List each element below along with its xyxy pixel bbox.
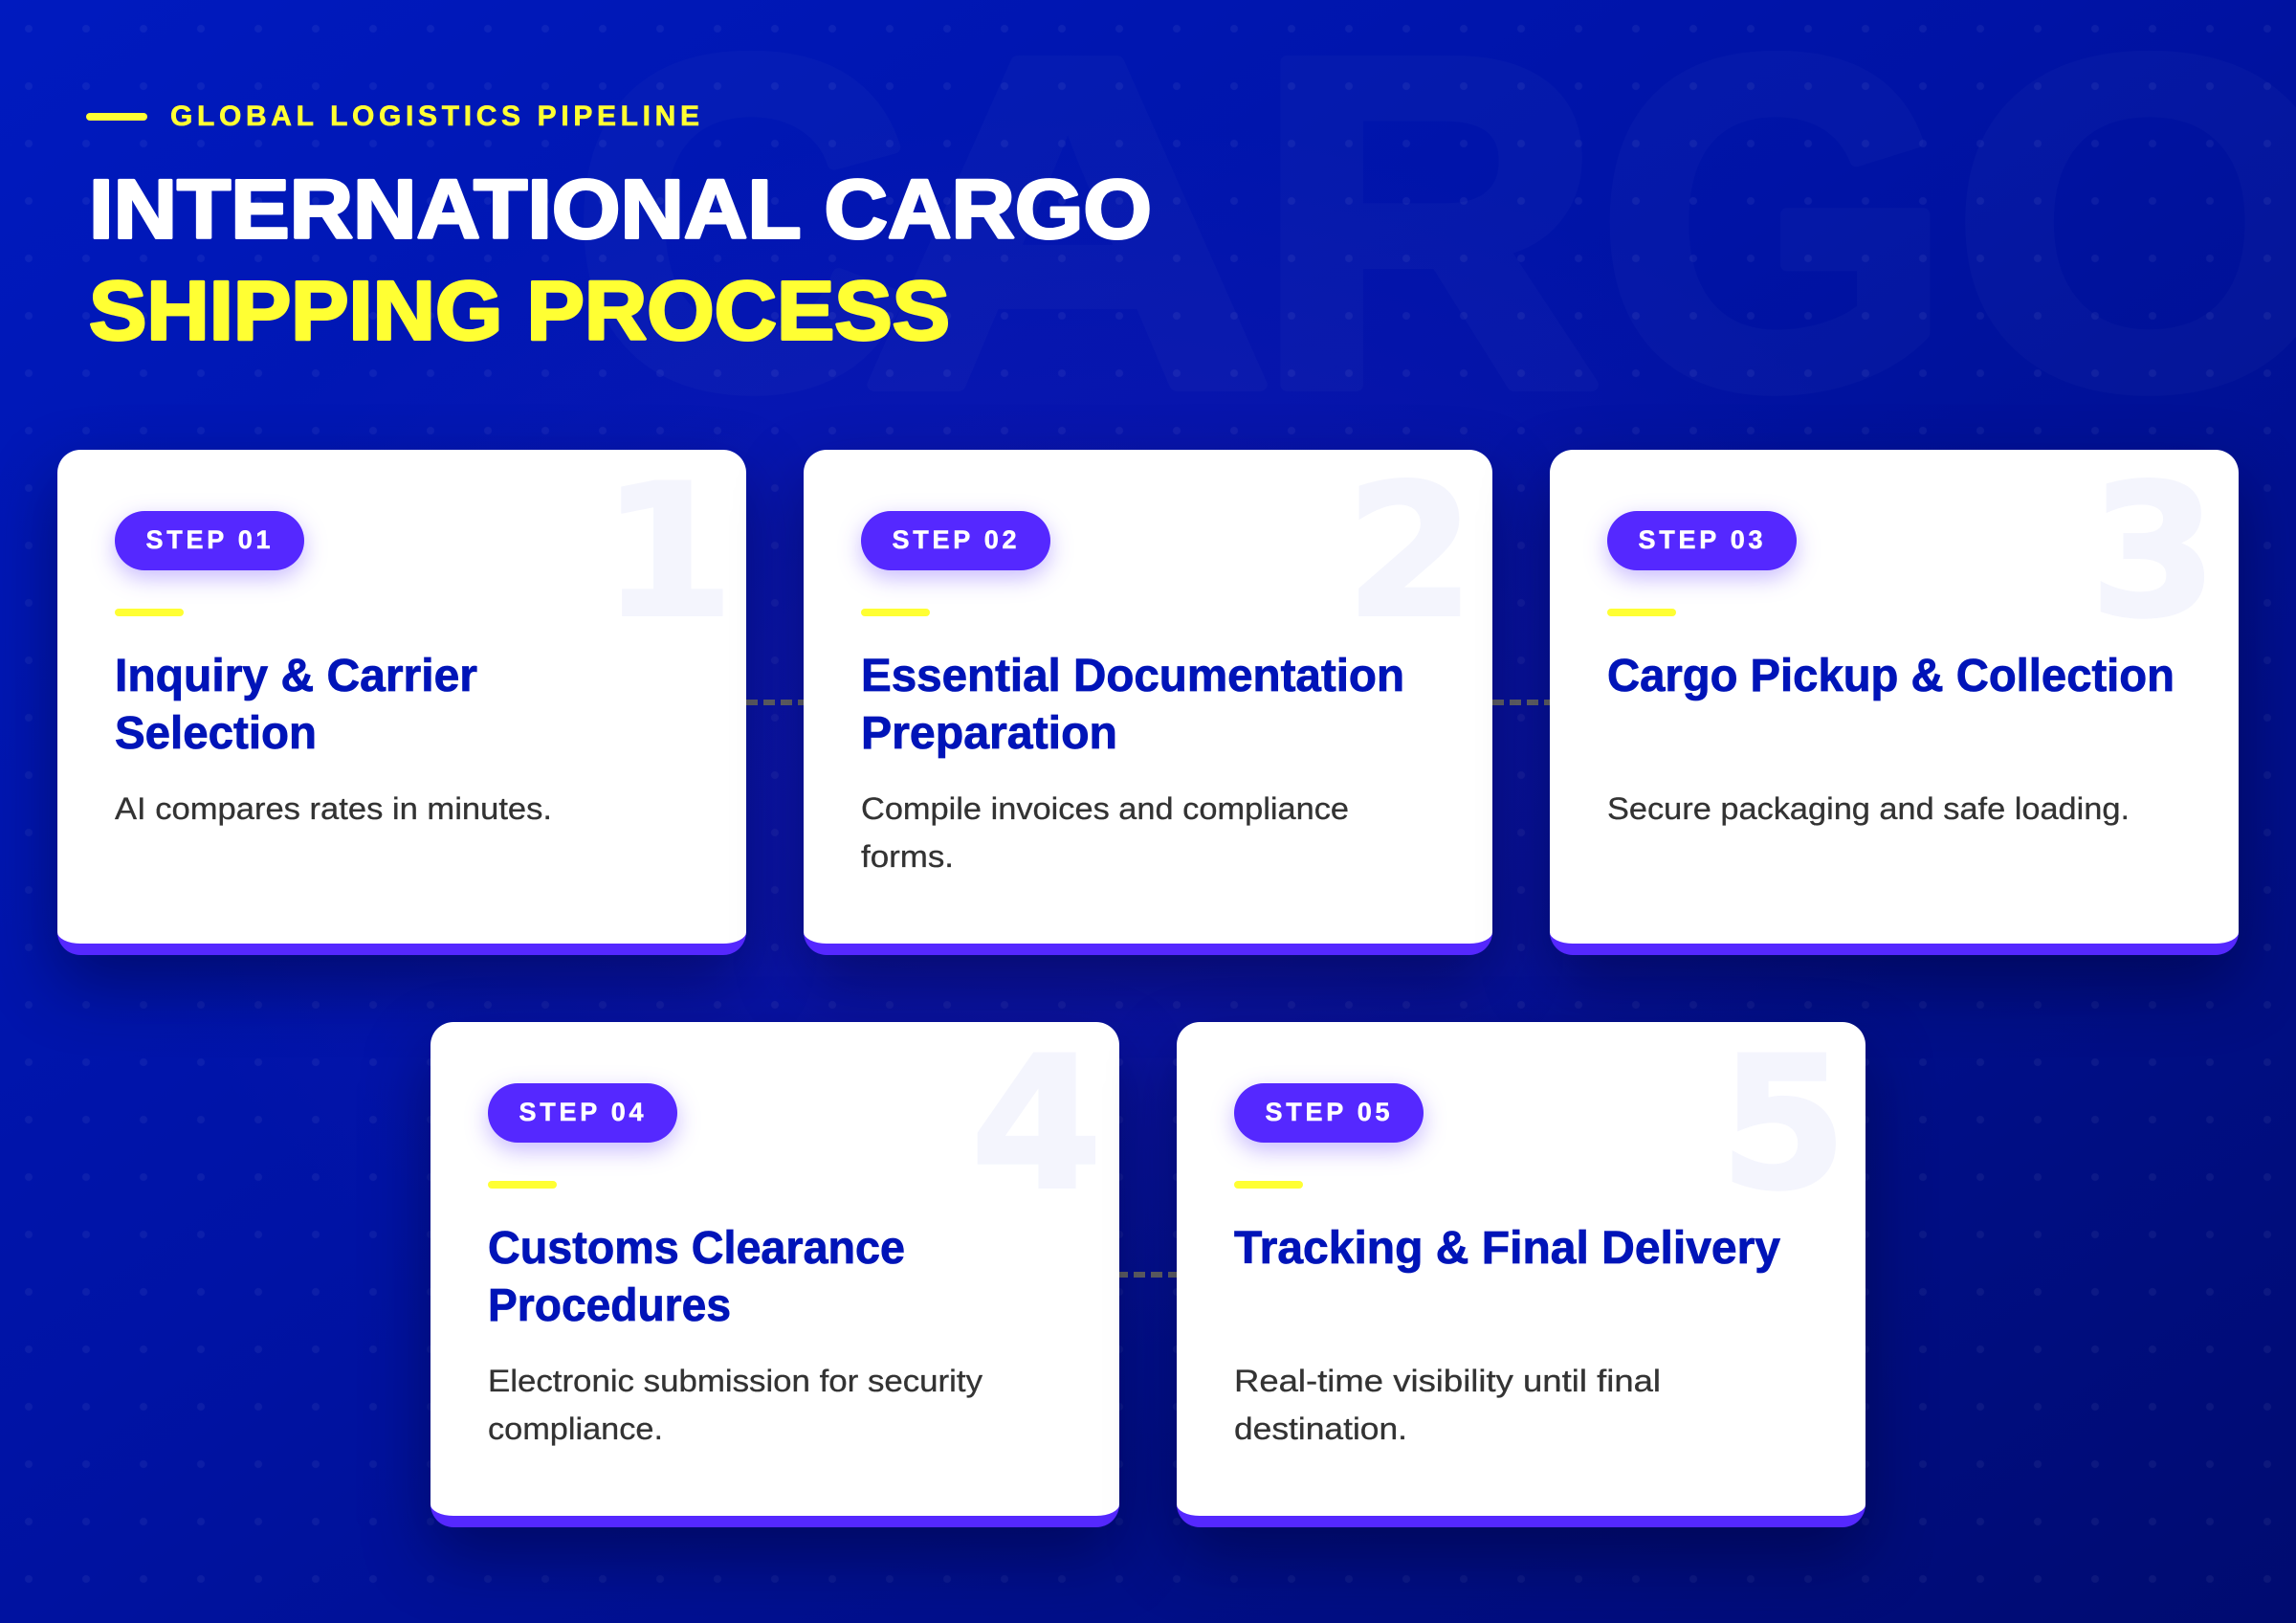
step description bbox=[488, 1364, 982, 1446]
title: INTERNATIONAL CARGO bbox=[89, 163, 1152, 256]
step title bbox=[488, 1223, 905, 1331]
panel: step 02 bbox=[804, 450, 1492, 955]
step badge: STEP 03 bbox=[1638, 525, 1762, 554]
step description: Secure packaging and safe loading. bbox=[1607, 791, 2130, 826]
yellow accent bar bbox=[1234, 1181, 1303, 1189]
yellow accent bar bbox=[1607, 609, 1676, 616]
big number 1: 1 bbox=[602, 446, 734, 657]
step title: Preparation bbox=[861, 708, 1117, 759]
step badge: STEP 04 bbox=[519, 1098, 643, 1126]
kicker: GLOBAL LOGISTICS PIPELINE bbox=[170, 100, 699, 132]
step description: Electronic submission for security bbox=[488, 1364, 982, 1398]
step title bbox=[861, 651, 1404, 759]
step title: Customs Clearance bbox=[488, 1223, 905, 1274]
step description: forms. bbox=[861, 839, 954, 874]
panel: step 05 bbox=[1177, 1022, 1866, 1527]
panel: step 01 bbox=[57, 450, 746, 955]
step badge bbox=[1234, 1083, 1424, 1143]
step badge bbox=[861, 511, 1050, 570]
step title bbox=[115, 651, 477, 759]
panel: step 03 bbox=[1550, 450, 2239, 955]
step title: Procedures bbox=[488, 1280, 731, 1331]
step title: Inquiry & Carrier bbox=[115, 651, 477, 701]
step badge bbox=[1607, 511, 1797, 570]
step badge: STEP 01 bbox=[145, 525, 270, 554]
big number 5: 5 bbox=[1720, 1018, 1846, 1230]
step badge: STEP 02 bbox=[892, 525, 1016, 554]
big number 4: 4 bbox=[971, 1018, 1102, 1230]
big number 3: 3 bbox=[2090, 446, 2217, 657]
header bbox=[86, 100, 1152, 358]
step badge bbox=[488, 1083, 677, 1143]
step description: AI compares rates in minutes. bbox=[115, 791, 552, 826]
step description bbox=[861, 791, 1349, 874]
yellow accent bar bbox=[488, 1181, 557, 1189]
connector: step 2 to step 3 bbox=[1492, 700, 1550, 705]
step description: Real-time visibility until final bbox=[1234, 1364, 1661, 1398]
panel: step 04 bbox=[430, 1022, 1119, 1527]
title: SHIPPING PROCESS bbox=[89, 264, 950, 358]
step description: Compile invoices and compliance bbox=[861, 791, 1349, 826]
step title: Cargo Pickup & Collection bbox=[1607, 651, 2175, 701]
step description: compliance. bbox=[488, 1412, 663, 1446]
step title: Essential Documentation bbox=[861, 651, 1404, 701]
big number 2: 2 bbox=[1346, 446, 1474, 657]
step title: Tracking & Final Delivery bbox=[1234, 1223, 1780, 1274]
yellow accent bar bbox=[861, 609, 930, 616]
step badge bbox=[115, 511, 304, 570]
step title: Selection bbox=[115, 708, 317, 759]
connector: step 1 to step 2 bbox=[746, 700, 804, 705]
step description bbox=[1234, 1364, 1661, 1446]
step badge: STEP 05 bbox=[1265, 1098, 1389, 1126]
title bbox=[89, 163, 1152, 358]
connector: step 4 to step 5 bbox=[1119, 1272, 1177, 1278]
yellow accent bar bbox=[115, 609, 184, 616]
step description: destination. bbox=[1234, 1412, 1407, 1446]
